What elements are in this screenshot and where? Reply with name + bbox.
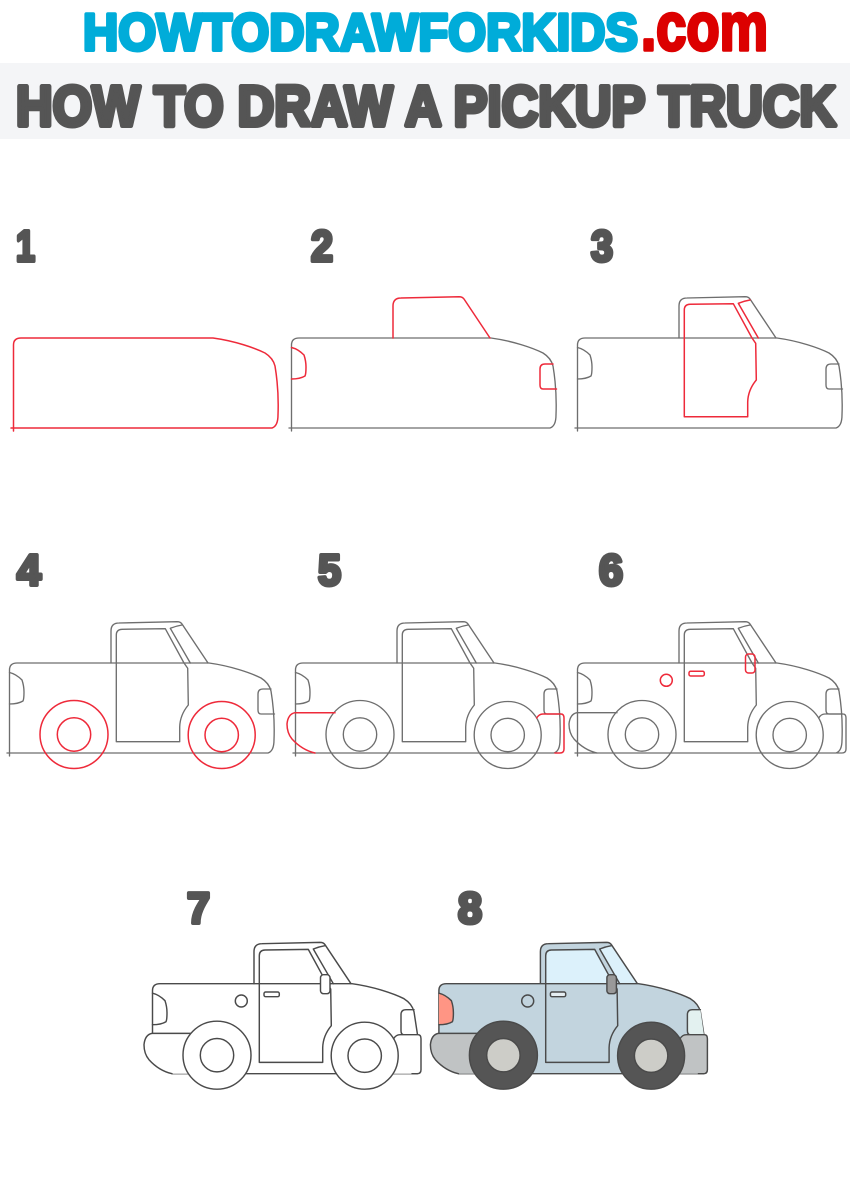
step 4 drawing: wheels — [7, 622, 274, 768]
step 7 number: 7 — [187, 884, 210, 933]
step 3 number: 3 — [591, 222, 613, 271]
step 4 number: 4 — [17, 546, 42, 595]
step 3 drawing: door and window pillar — [575, 297, 842, 431]
step 1 number: 1 — [16, 222, 35, 271]
step 1 drawing: truck body outline — [11, 338, 278, 431]
step 8 drawing: coloured truck — [430, 942, 707, 1089]
site logo: HOWTODRAWFORKIDS — [83, 4, 638, 62]
step 5 number: 5 — [318, 546, 341, 595]
step 2 drawing: cab and lights — [289, 297, 556, 431]
step 8 number: 8 — [458, 884, 482, 933]
step 5 drawing: bumpers — [287, 622, 564, 768]
step 6 drawing: fuel cap, handle, mirror — [569, 622, 846, 768]
step 7 drawing: clean outline — [144, 942, 421, 1089]
step 2 number: 2 — [311, 222, 333, 271]
step 6 number: 6 — [599, 546, 623, 595]
